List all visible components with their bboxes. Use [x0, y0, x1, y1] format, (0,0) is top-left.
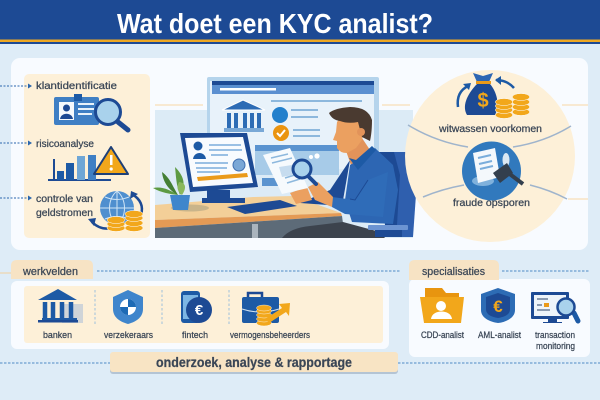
icon: CDD folder [420, 288, 464, 323]
illustration: analyst at desk [153, 77, 418, 238]
label: vermogensbeheerders: vermogensbeheerders [230, 330, 310, 340]
icon: ID card with magnifier [54, 94, 128, 130]
icon: AML shield: € [493, 297, 503, 316]
label: klantidentificatie: klantidentificatie [36, 81, 117, 92]
panel: taken [0, 74, 150, 238]
footer banner [0, 352, 600, 374]
label: witwassen voorkomen: witwassen voorkomen [438, 124, 542, 135]
heading: specialisaties: specialisaties [422, 266, 485, 278]
icon: bank [38, 289, 83, 323]
person [282, 107, 418, 238]
label: fintech: fintech [182, 330, 208, 340]
label: AML-analist: AML-analist [478, 330, 521, 340]
icon: transaction monitoring [531, 292, 578, 323]
label: fraude opsporen: fraude opsporen [453, 198, 530, 209]
heading: werkvelden: werkvelden [22, 266, 78, 278]
document and magnifier [263, 148, 316, 194]
icon: phone with euro [181, 291, 212, 323]
icon: phone with euro: € [195, 302, 204, 319]
icon: document and gavel [462, 142, 523, 200]
label: verzekeraars: verzekeraars [104, 330, 153, 340]
icon: money bag and coins [458, 73, 530, 118]
arrow: risicoanalyse [0, 140, 32, 146]
label: risicoanalyse: risicoanalyse [36, 139, 94, 150]
keyboard [227, 200, 297, 214]
arrow: controle van geldstromen [0, 196, 32, 200]
arrow: klantidentificatie [0, 84, 32, 88]
icon: briefcase with coins [242, 293, 290, 326]
panel: werkvelden [0, 260, 401, 349]
main panel [11, 58, 588, 250]
label: controle van geldstromen: controle van [36, 194, 93, 205]
footer text: onderzoek, analyse & rapportage [156, 354, 352, 370]
big back screen [207, 77, 379, 169]
icon: chart with warning [48, 147, 128, 180]
label: transaction monitoring: transaction [535, 330, 575, 340]
icon: AML shield [481, 288, 515, 323]
icon: money bag and coins: $ [477, 90, 489, 112]
desk [155, 196, 345, 238]
header banner [0, 0, 600, 44]
plant [153, 167, 209, 212]
panel: doelen circle [405, 70, 588, 242]
panel: specialisaties: monitoring [536, 341, 575, 351]
title: Wat doet een KYC analist? [117, 8, 433, 39]
label: banken: banken [43, 330, 72, 340]
icon: shield [113, 290, 143, 324]
icon: globe and coins [88, 191, 143, 232]
label: CDD-analist: CDD-analist [421, 330, 464, 340]
panel: taken: geldstromen [36, 208, 93, 219]
small monitor [180, 133, 258, 203]
panel: specialisaties [409, 260, 590, 357]
